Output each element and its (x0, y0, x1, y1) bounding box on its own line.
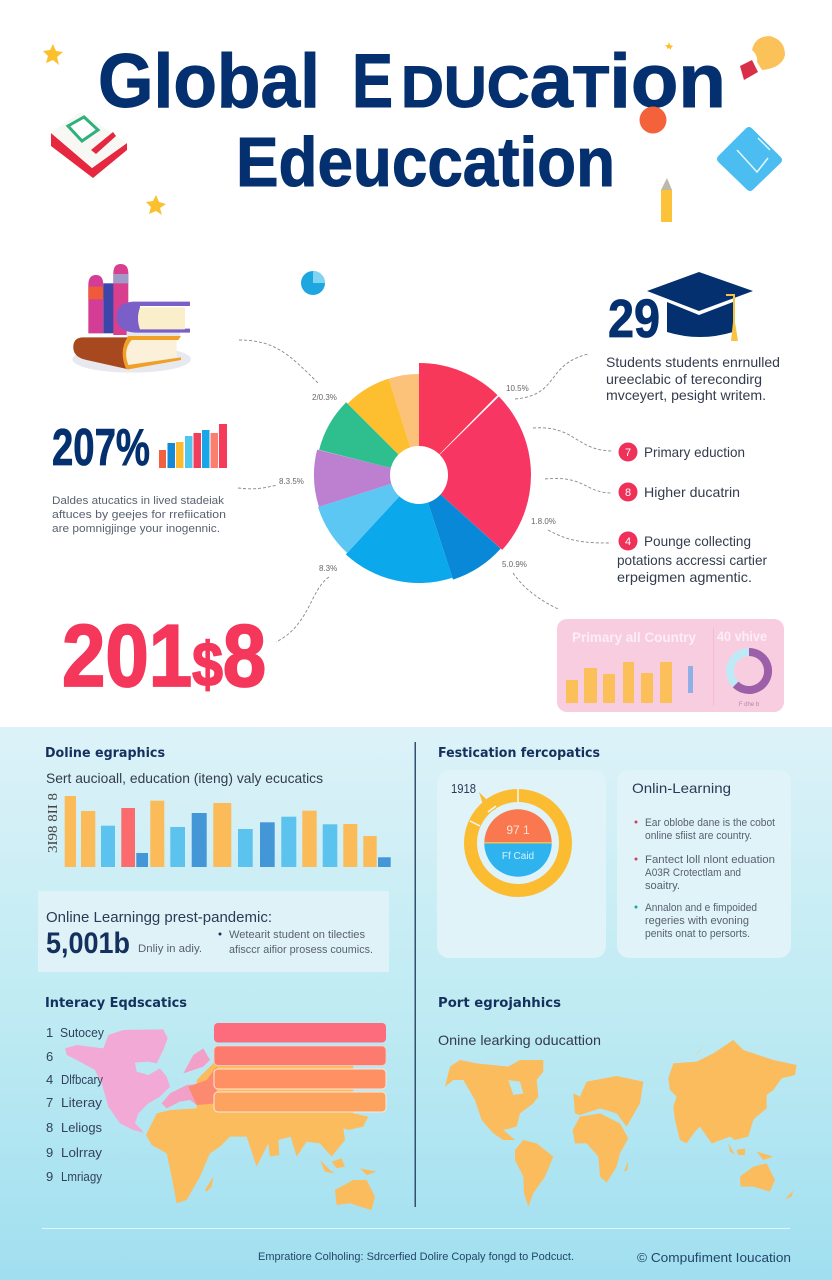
icon: star small (665, 42, 673, 50)
pie labels: 8.3.5% (279, 477, 304, 486)
panel: online learning notes: penits onat to persorts. (645, 928, 750, 940)
literacy list: 4 (46, 1072, 53, 1087)
icon: red book (51, 112, 127, 178)
panel: online learning notes: online sfiist are country. (645, 830, 752, 842)
panel: online learning notes (617, 770, 791, 958)
literacy list: 1 (46, 1025, 53, 1040)
panel: primary by country (557, 619, 784, 712)
panel: online learning stat: Dnliy in adiy. (138, 943, 202, 955)
literacy list: Leliogs (61, 1120, 102, 1135)
world map: right (445, 1040, 797, 1207)
panel: online learning notes: Onlin-Learning (632, 780, 731, 796)
icon: pencil (661, 178, 672, 222)
pie labels: 1.8.0% (531, 517, 556, 526)
legend: primary education (618, 442, 745, 462)
text block: students: ureeclabic of terecondirg (606, 371, 762, 387)
text block: left description: are pomnigjinge your inogennic. (52, 523, 220, 535)
panel: primary by country: Primary all Country (572, 629, 696, 645)
panel: online learning notes: soaitry. (645, 880, 680, 892)
heading: demographics: Doline egraphics (45, 746, 165, 761)
text block: left description (52, 495, 226, 535)
icon: stack of books (72, 264, 191, 373)
panel donut (730, 652, 768, 690)
legend: higher education (618, 482, 740, 502)
panel: online learning stat: Wetearit student on tilecties (229, 929, 366, 941)
footer credit: © Compufiment Ioucation (637, 1250, 791, 1265)
legend: higher education: 8 (625, 487, 631, 499)
literacy list: Lmriagy (61, 1169, 102, 1184)
literacy list: 8 (46, 1120, 53, 1135)
ring center: Ff Caid (502, 851, 534, 862)
panel: ring chart: 1918 (451, 781, 476, 796)
bar chart (65, 796, 391, 867)
pie labels: 10.5% (506, 384, 529, 393)
icon: star left (43, 44, 63, 65)
literacy list (46, 1025, 104, 1184)
leader lines (238, 340, 612, 642)
pie labels: 8.3% (319, 564, 337, 573)
stat: 201$8: 201$8 (62, 607, 266, 705)
panel: online learning notes: A03R Crotectlam and (645, 867, 741, 879)
heading: port geographics: Port egrojahhics (438, 996, 561, 1011)
panel bar chart (566, 662, 672, 703)
map subtitle: Onine learking oducattion (438, 1032, 601, 1048)
pie chart (314, 363, 531, 583)
panel: online learning stat (38, 891, 389, 972)
mini bar chart (159, 424, 227, 468)
lower background (0, 727, 832, 1280)
legend: primary education: Primary eduction (644, 444, 745, 460)
panel: ring chart (437, 770, 606, 958)
title (98, 38, 726, 202)
title: E (352, 38, 393, 123)
text block: students: Students students enrnulled (606, 354, 780, 370)
panel: online learning stat: 5,001b (46, 927, 130, 960)
heading: fertility: Festication fercopatics (438, 746, 600, 761)
stat: 29: 29 (608, 288, 660, 349)
ring (470, 789, 566, 890)
text block: students (606, 354, 780, 403)
literacy list: Lolrray (61, 1145, 103, 1160)
chart subtitle: Sert aucioall, education (iteng) valy ecucatics (46, 770, 323, 786)
ring center: 97 1 (506, 823, 530, 837)
pie labels: 2/0.3% (312, 393, 337, 402)
pie labels: 5.0.9% (502, 560, 527, 569)
icon: star lower (146, 195, 166, 215)
literacy list: Literay (61, 1095, 103, 1110)
text block: students: mvceyert, pesight writem. (606, 387, 766, 403)
axis labels: 3I98 8II 8 (46, 793, 61, 853)
legend: collecting: potations accressi cartier (617, 552, 767, 568)
text block: left description: Daldes atucatics in lived stadeiak (52, 495, 225, 507)
horizontal bars (214, 1023, 386, 1112)
literacy list: Dlfbcary (61, 1072, 103, 1087)
stat: 207%: 207% (52, 418, 150, 476)
legend: collecting: 4 (625, 536, 631, 548)
footer rule (42, 1228, 790, 1229)
text block: left description: aftuces by geejes for rrefiication (52, 509, 226, 521)
pie labels (279, 384, 556, 573)
panel: online learning stat: Online Learningg prest-pandemic: (46, 909, 272, 926)
legend: collecting: Pounge collecting (644, 533, 751, 549)
icon: small blue circle (301, 271, 325, 295)
literacy list: 7 (46, 1095, 53, 1110)
panel: online learning notes: Ear oblobe dane is the cobot (645, 817, 775, 829)
title: Edeuccation (236, 123, 615, 202)
icon: graduation cap (647, 272, 753, 341)
panel: online learning notes: Fantect loll nlont eduation (645, 854, 775, 866)
panel: primary by country: F dhe b (739, 702, 760, 708)
panel: online learning notes: regeries with evoning (645, 915, 749, 927)
icon: orange ball (640, 106, 666, 134)
world map: left (65, 1029, 377, 1210)
legend: collecting (617, 532, 767, 585)
title: DUCaTion (401, 39, 726, 124)
literacy list: 6 (46, 1049, 53, 1064)
icon: light bulb (740, 36, 785, 80)
footer text: Empratiore Colholing: Sdrcerfied Dolire Copaly fongd to Podcuct. (258, 1251, 574, 1263)
legend: higher education: Higher ducatrin (644, 484, 740, 500)
icon: blue notebook (721, 131, 778, 187)
literacy list: 9 (46, 1169, 53, 1184)
panel: online learning stat: afisccr aifior prosess coumics. (229, 944, 373, 956)
panel: online learning notes: Annalon and e fimpoided (645, 902, 757, 914)
literacy list: 9 (46, 1145, 53, 1160)
heading: literacy: Interacy Eqdscatics (45, 996, 187, 1011)
legend: primary education: 7 (625, 447, 631, 459)
ring center (484, 809, 552, 877)
legend: collecting: erpeigmen agmentic. (617, 569, 752, 585)
panel: primary by country: 40 vhive (717, 628, 767, 644)
literacy list: Sutocey (60, 1025, 104, 1040)
title: Global (98, 38, 320, 123)
